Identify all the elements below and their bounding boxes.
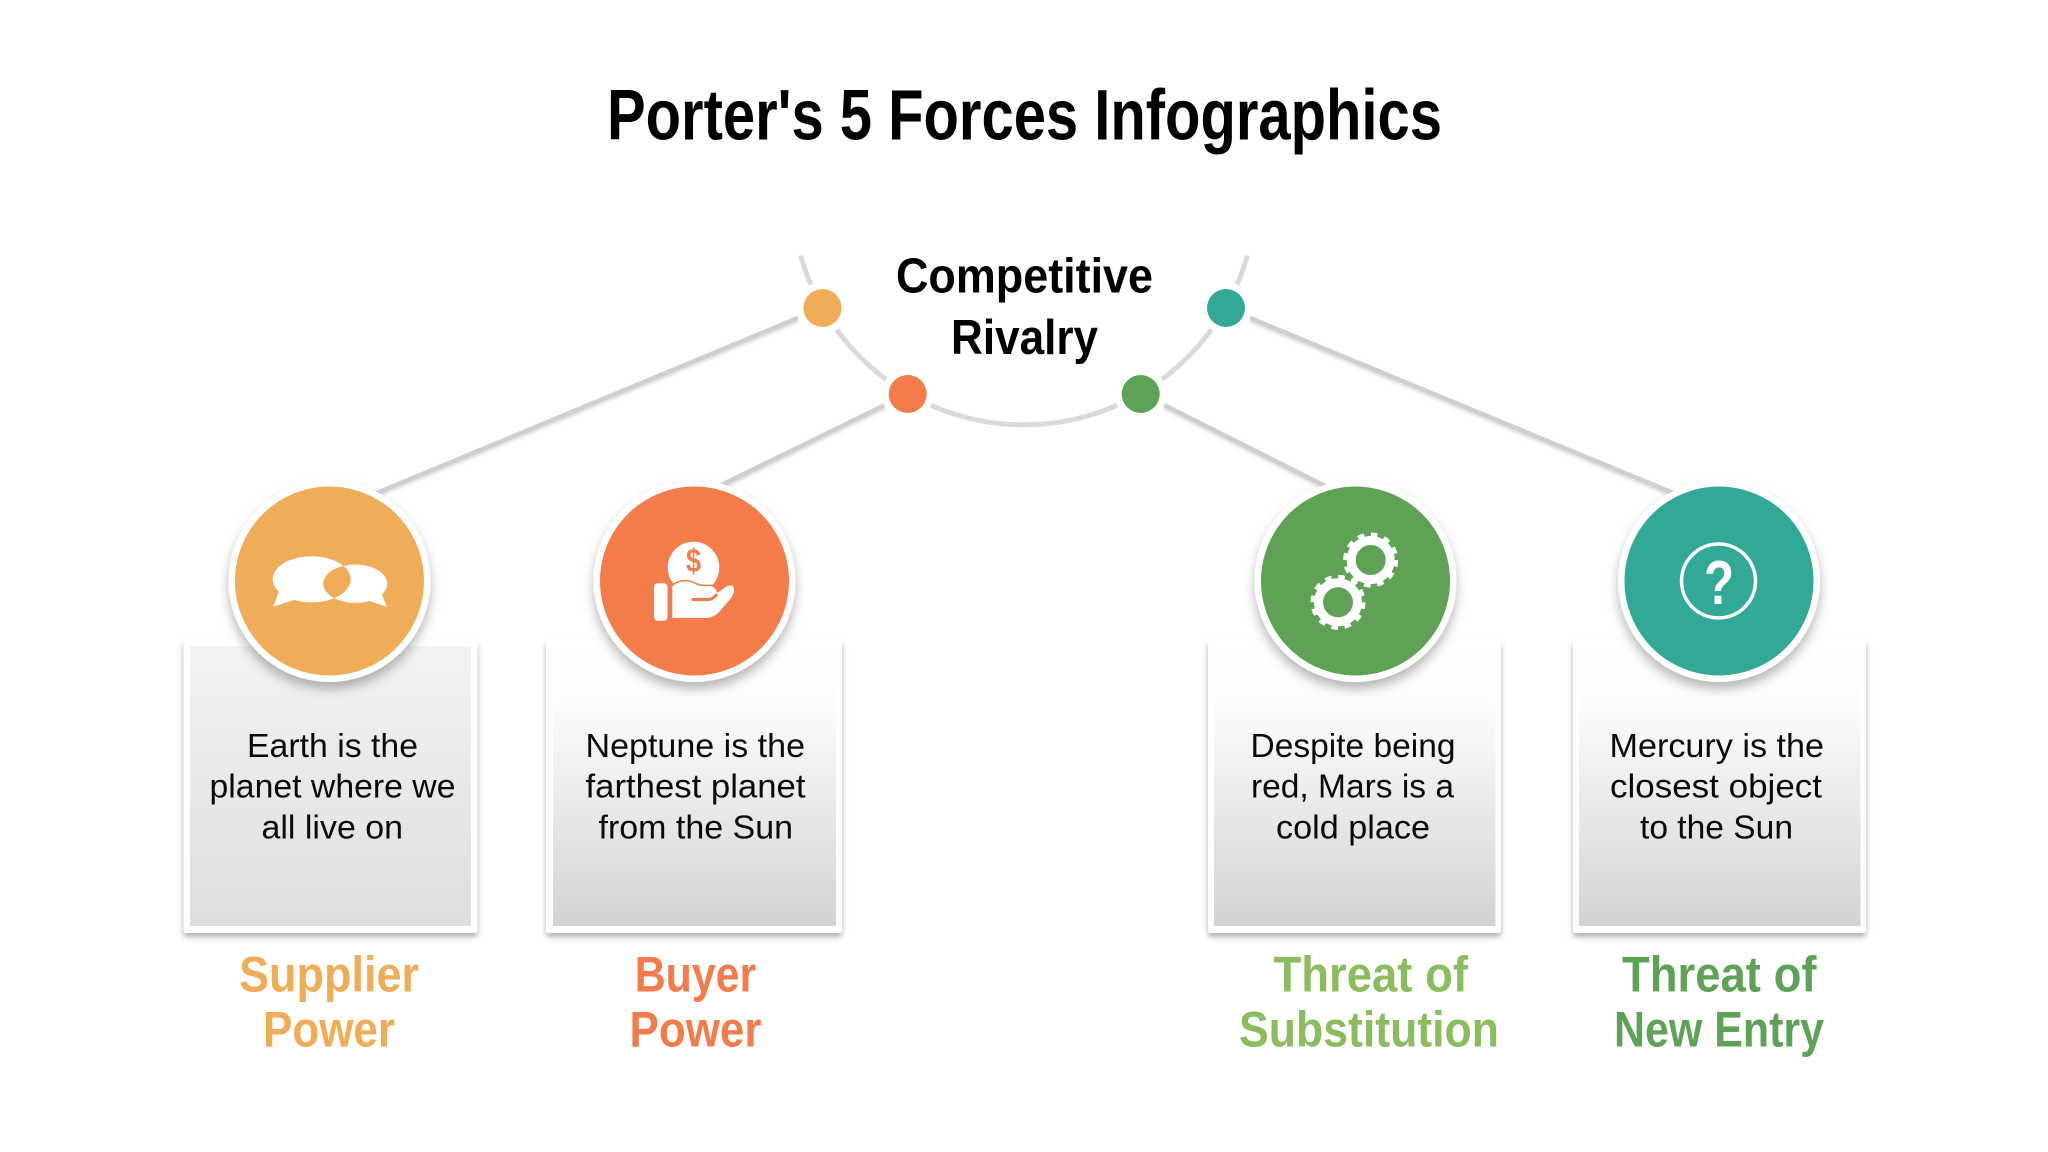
connector lines (360, 318, 1690, 500)
label: threat of new entry: Threat of (1622, 946, 1817, 1002)
node: new entry (1207, 289, 1245, 327)
card text (210, 727, 456, 846)
card text (1250, 727, 1456, 846)
label: supplier power: Power (263, 1002, 395, 1058)
label: buyer power: Buyer (635, 946, 756, 1002)
heading: competitive rivalry: Rivalry (951, 311, 1098, 365)
label: threat of substitution: Substitution (1239, 1002, 1499, 1058)
icon: question mark (1624, 486, 1814, 676)
card text: farthest planet (586, 768, 806, 804)
label: threat of new entry: New Entry (1614, 1002, 1824, 1058)
card text: to the Sun (1640, 808, 1793, 846)
label: buyer power: Power (630, 1002, 762, 1058)
icon: hand holding coin (600, 486, 789, 676)
card text: cold place (1276, 808, 1430, 846)
card text: closest object (1610, 768, 1822, 804)
panel: threat of new entry (1573, 486, 1866, 1058)
card text: all live on (262, 808, 403, 846)
label: threat of substitution (1239, 946, 1499, 1058)
card text: Mercury is the (1610, 727, 1824, 764)
rivalry arc with nodes (801, 256, 1247, 425)
card text: Earth is the (247, 727, 418, 764)
icon: chat bubbles (235, 486, 424, 676)
card (184, 640, 478, 933)
label: threat of substitution: Threat of (1274, 946, 1468, 1002)
card text: Neptune is the (586, 727, 805, 764)
node: substitution (1122, 375, 1160, 413)
icon: gears (1261, 486, 1450, 676)
label: buyer power (630, 946, 762, 1058)
icon: question mark: ? (1704, 549, 1734, 618)
card (1208, 640, 1501, 933)
label: threat of new entry (1614, 946, 1824, 1058)
label: supplier power: Supplier (239, 946, 419, 1002)
card (546, 640, 842, 933)
heading: competitive rivalry: Competitive (896, 250, 1153, 304)
node: supplier (804, 289, 842, 327)
title: Porter's 5 Forces Infographics (607, 76, 1442, 156)
card text: Despite being (1250, 727, 1456, 764)
label: supplier power (239, 946, 419, 1058)
card (1573, 640, 1866, 933)
panel: buyer power (546, 486, 842, 1058)
card text (586, 727, 806, 846)
heading: competitive rivalry (896, 250, 1153, 365)
node: buyer (889, 375, 927, 413)
card text: from the Sun (598, 808, 793, 846)
card text (1610, 727, 1824, 846)
panel: supplier power (184, 486, 478, 1058)
panel: threat of substitution (1208, 486, 1501, 1058)
card text: planet where we (210, 768, 456, 804)
card text: red, Mars is a (1251, 768, 1455, 804)
icon: hand holding coin: $ (686, 542, 701, 579)
